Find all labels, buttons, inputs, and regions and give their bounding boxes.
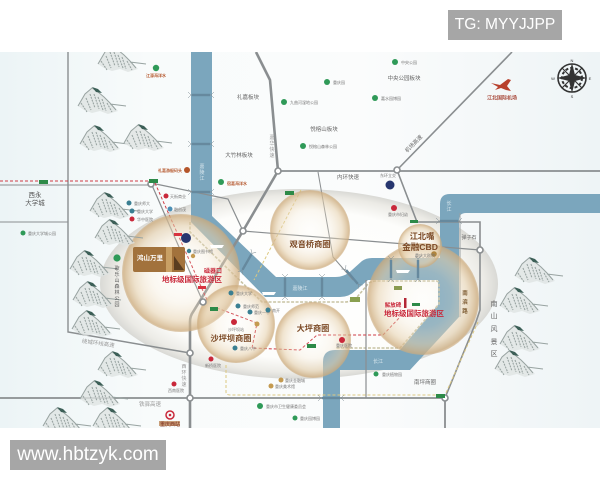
compass: N — [571, 58, 574, 63]
district headings: 沙坪坝商圈 — [211, 333, 251, 343]
small POI markers and labels: 宿嘉海洋水 — [227, 180, 247, 186]
vertical park label — [113, 254, 121, 308]
tourism zone labels: 磁器口 — [204, 267, 222, 275]
river labels: 陵 — [199, 169, 205, 176]
small POI markers and labels: 融创茂 — [174, 206, 186, 212]
Nanshan scenic area: 景 — [490, 338, 498, 346]
district headings: 观音桥商圈 — [290, 239, 330, 249]
area labels: 南坪商圈 — [414, 378, 436, 386]
district headings: 江北嘴 — [410, 231, 434, 241]
vertical park label: 林 — [114, 289, 120, 296]
small POI markers and labels: 新桥医院 — [205, 362, 221, 368]
area labels: 绕城环线高速 — [81, 337, 116, 349]
area labels: 速 — [181, 382, 187, 388]
Nanbin road label: 滨 — [462, 298, 468, 306]
watermark: TG handle: TG: MYYJJPP — [455, 16, 555, 33]
peninsula edge railway — [190, 222, 439, 348]
Nanshan scenic area: 风 — [490, 325, 498, 333]
Xiyong label: 西永 — [28, 190, 42, 199]
small POI markers and labels: 东环立交 — [380, 172, 396, 178]
area labels: 中央公园板块 — [387, 74, 421, 82]
compass: E — [589, 76, 592, 81]
small POI markers and labels: 重庆师大 — [134, 200, 150, 206]
project logo — [133, 247, 185, 272]
circle: Jiangbeizui CBD — [398, 224, 442, 268]
vertical park label: 乐 — [114, 271, 120, 278]
Jiangbei airport — [487, 79, 517, 102]
river ship icons — [210, 245, 410, 295]
tourism zone labels: 地标级国际旅游区 — [384, 308, 444, 318]
vertical park label: 歌 — [114, 265, 120, 272]
small POI markers and labels: 重庆金融城 — [285, 377, 305, 383]
Nanshan scenic area: 区 — [490, 350, 498, 358]
area labels: 铁驿高速 — [139, 400, 161, 408]
river labels — [199, 163, 452, 365]
watermark: website: www.hbtzyk.com — [17, 444, 159, 465]
small POI markers and labels: 沙坪坝站 — [228, 326, 244, 332]
small POI markers and labels: 重庆师范 — [243, 303, 259, 309]
mountain illustrations — [43, 45, 563, 434]
district headings: 大坪商圈 — [297, 323, 329, 333]
road junction nodes — [148, 167, 483, 401]
vertical park label: 山 — [114, 277, 120, 284]
vertical park label: 公 — [114, 296, 120, 302]
Chongqing West Station — [159, 411, 180, 428]
small POI markers and labels: 重庆大剧院 — [415, 252, 435, 258]
map background — [0, 52, 600, 428]
area labels: 礼嘉板块 — [237, 93, 259, 101]
Chongqing West Station: 重庆西站 — [160, 421, 180, 428]
small POI markers and labels: 礼嘉游艇码头 — [158, 167, 182, 173]
yellow dashed zone boundary — [226, 190, 478, 395]
Nanshan scenic area: 南 — [490, 299, 498, 308]
central urban bubble — [100, 189, 498, 379]
small POI markers and labels: 重庆大学 — [137, 208, 153, 214]
watermark: TG handle — [448, 10, 562, 40]
compass — [551, 58, 592, 99]
small POI markers and labels: 重庆一中 — [254, 309, 270, 315]
small POI markers and labels: 重庆图书馆 — [193, 248, 213, 254]
small POI markers and labels: 九曲河湿地公园 — [290, 99, 318, 105]
small POI markers and labels: 嘉水园博园 — [381, 95, 401, 101]
tourism zone labels — [162, 267, 444, 318]
area labels: 快 — [269, 146, 275, 153]
river labels: 江 — [446, 206, 452, 213]
watermark: website — [10, 440, 166, 470]
small POI markers and labels: 江源海洋水 — [146, 72, 166, 78]
commercial circles — [122, 190, 479, 378]
red metro lines — [0, 181, 400, 350]
circle: Daping — [275, 302, 351, 378]
Nanbin road label: 路 — [462, 307, 468, 315]
circle: Guanyinqiao — [270, 190, 350, 270]
small POI markers and labels: 重庆市妇幼 — [388, 211, 408, 217]
district headings — [211, 231, 438, 343]
university town label: 大学城 — [25, 198, 45, 207]
small POI markers and labels: 中央公园 — [401, 59, 417, 65]
area labels — [81, 74, 436, 408]
vertical park label: 园 — [114, 302, 120, 308]
river labels: 长江 — [373, 358, 383, 365]
river labels: 江 — [199, 175, 205, 182]
Nanshan scenic area: 山 — [490, 311, 498, 320]
district headings: 金融CBD — [402, 241, 438, 252]
rivers: Jialing and Yangtze — [191, 52, 600, 428]
river labels: 嘉 — [199, 163, 205, 170]
circle: Shapingba — [197, 285, 275, 363]
small POI markers and labels: 华中医院 — [137, 216, 153, 222]
small POI markers and labels: 悦榕山森林公园 — [309, 143, 337, 149]
compass: S — [571, 94, 574, 99]
small POI markers and labels: 天街商业 — [170, 193, 186, 199]
circle: east district — [367, 243, 479, 355]
small POI markers and labels: 重庆大学 — [236, 290, 252, 296]
small POI markers and labels: 重庆医院 — [336, 342, 352, 348]
area labels: 内环快速 — [337, 173, 359, 181]
small POI markers and labels: 西南医院 — [168, 387, 184, 393]
river labels: 嘉陵江 — [292, 285, 308, 292]
small POI markers and labels: 重庆园 — [333, 79, 345, 85]
small POI markers and labels: 重庆八中 — [240, 345, 256, 351]
small POI markers and labels: 重庆美术馆 — [275, 383, 295, 389]
road network — [0, 52, 600, 428]
compass: W — [551, 76, 555, 81]
area labels: 嘉 — [269, 134, 275, 141]
tourism zone labels: 解放碑 — [385, 301, 402, 309]
small POI markers and labels: 南开 — [272, 307, 280, 313]
project logo: 鸿山万里 — [137, 253, 164, 262]
small POI markers and labels: 重庆市卫生健康委员会 — [266, 403, 306, 409]
area labels: 西 — [181, 364, 187, 370]
river labels: 长 — [446, 200, 452, 207]
bridges — [188, 92, 462, 401]
area labels: 速 — [269, 153, 275, 159]
area labels: 快 — [181, 375, 187, 382]
area labels: 环 — [181, 370, 187, 376]
area labels: 华 — [269, 140, 275, 147]
location map — [0, 52, 600, 428]
circle: west district — [122, 214, 240, 332]
small POI markers and labels: 重庆大学城公园 — [28, 230, 56, 236]
Nanbin road label: 南 — [462, 289, 468, 297]
small POI markers and labels: 重庆园博园 — [300, 415, 320, 421]
tourism zone labels: 地标级国际旅游区 — [162, 274, 222, 284]
vertical park label: 森 — [114, 283, 120, 290]
small POI markers and labels: 重庆植物园 — [382, 371, 402, 377]
area labels: 机场高速 — [403, 133, 425, 154]
Jiangbei airport: 江北国际机场 — [487, 94, 517, 102]
area labels: 悦榕山板块 — [310, 125, 338, 133]
area labels: 大竹林板块 — [225, 151, 253, 159]
Danzishi label: 弹子石 — [461, 234, 477, 241]
small POI markers and labels — [20, 59, 445, 421]
